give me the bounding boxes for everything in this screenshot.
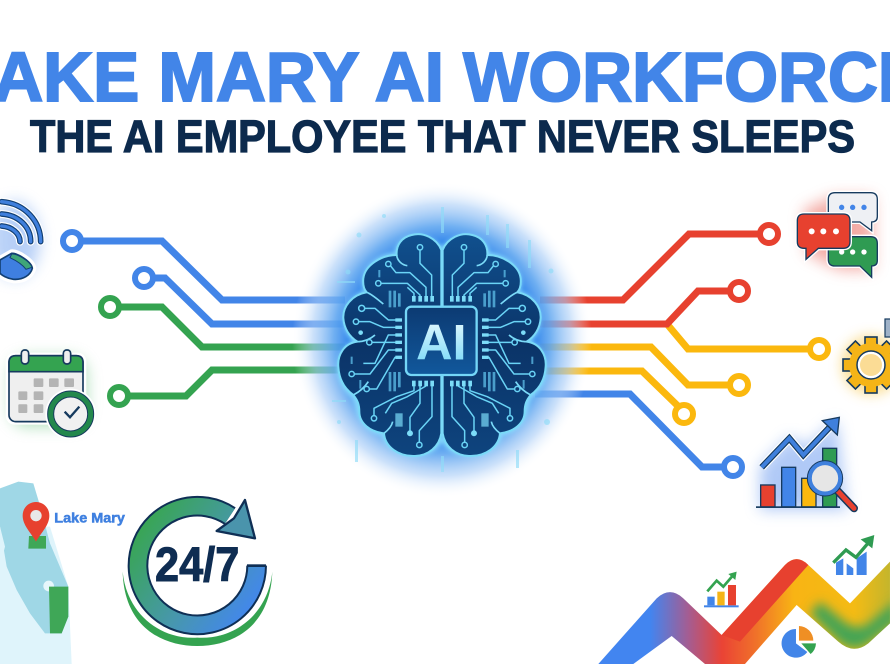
region highlight: [28, 536, 46, 549]
map of Florida: [0, 482, 125, 664]
brain outline glow: [340, 238, 544, 454]
icon: calendar with clock: [6, 350, 96, 439]
circuit traces: left: [63, 232, 345, 405]
icon: phone with signal waves: [0, 202, 41, 279]
label: Lake Mary: Lake Mary: [54, 511, 125, 526]
icon: growth chart with magnifier: [756, 417, 854, 510]
icon: gear: [841, 319, 890, 395]
rising chart: [833, 535, 874, 575]
24/7 badge: [123, 500, 272, 646]
brain glow: [292, 182, 592, 498]
pie chart: [782, 626, 816, 658]
brain right hemisphere: [443, 234, 546, 456]
AI chip: [406, 307, 477, 375]
brain with AI chip: [338, 234, 546, 456]
colored growth ribbon: [598, 535, 890, 664]
icon: chat bubbles: [797, 193, 877, 277]
circuit traces: right: [535, 225, 828, 476]
small bar chart: [704, 572, 739, 607]
glow sparks: [332, 207, 554, 472]
24/7 text: 24/7: [155, 538, 239, 592]
AI label: AI: [416, 314, 467, 370]
brain left hemisphere: [338, 234, 441, 456]
icon: location pin: [23, 502, 49, 542]
